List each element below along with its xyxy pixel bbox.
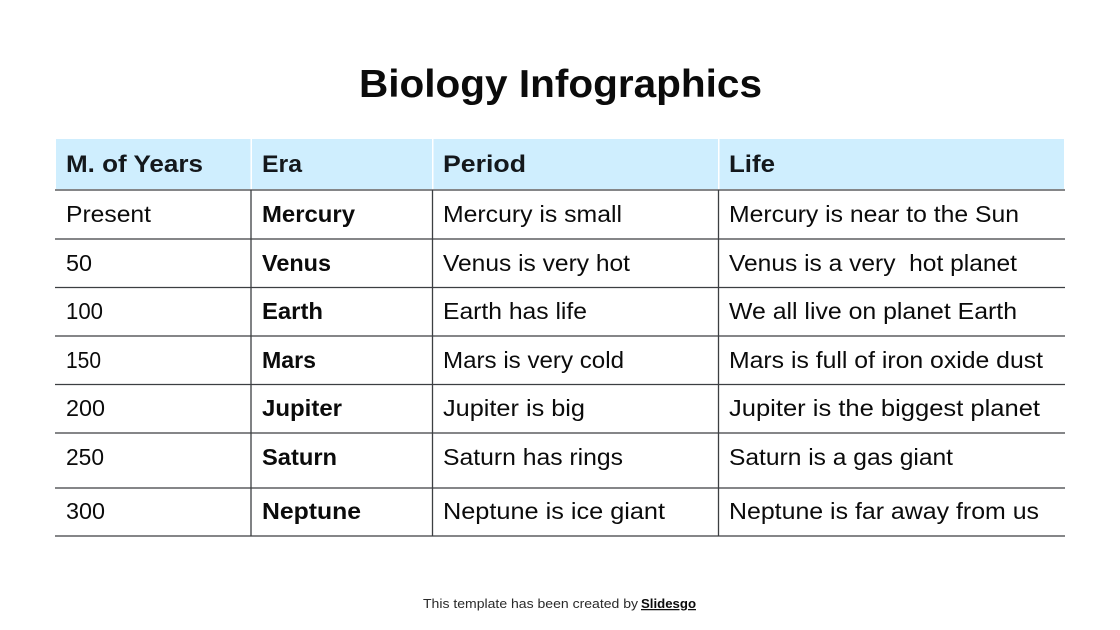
row: Saturn xyxy=(66,444,954,470)
row: Neptune: Neptune is far away from us xyxy=(729,498,1039,524)
row: Venus: Venus is a very hot planet xyxy=(729,250,1018,276)
row: Mars: Mars is full of iron oxide dust xyxy=(729,347,1044,373)
row: Mercury: Mercury is small xyxy=(443,201,622,227)
row: Mercury xyxy=(66,201,1019,227)
table xyxy=(55,139,1065,536)
row: Earth: Earth has life xyxy=(443,298,587,324)
row: Neptune: 300 xyxy=(66,498,105,524)
row: Jupiter: 200 xyxy=(66,395,105,421)
table header row: Period xyxy=(443,151,526,178)
table header row xyxy=(56,139,1064,189)
table header row: M. of Years xyxy=(66,151,203,178)
row: Jupiter: Jupiter xyxy=(262,395,342,421)
row: Earth: We all live on planet Earth xyxy=(729,298,1017,324)
row: Mars: Mars xyxy=(262,347,316,373)
row: Neptune xyxy=(66,498,1039,524)
row: Mars: 150 xyxy=(66,347,101,373)
footer credit: Slidesgo xyxy=(641,597,696,611)
row: Earth: 100 xyxy=(66,298,103,324)
table header row: Life xyxy=(729,151,775,178)
row: Earth xyxy=(66,298,1017,324)
row: Jupiter: Jupiter is the biggest planet xyxy=(729,395,1041,421)
row: Venus: Venus is very hot xyxy=(443,250,631,276)
row: Mercury: Mercury is near to the Sun xyxy=(729,201,1019,227)
row: Mercury: Present xyxy=(66,201,152,227)
table header row: Era xyxy=(262,151,302,178)
row: Saturn: Saturn xyxy=(262,444,337,470)
row: Venus: Venus xyxy=(262,250,331,276)
row: Saturn: Saturn is a gas giant xyxy=(729,444,954,470)
row: Jupiter xyxy=(66,395,1041,421)
row: Earth: Earth xyxy=(262,298,323,324)
row: Mercury: Mercury xyxy=(262,201,355,227)
row: Saturn: 250 xyxy=(66,444,104,470)
row: Mars: Mars is very cold xyxy=(443,347,624,373)
row: Saturn: Saturn has rings xyxy=(443,444,623,470)
footer credit: This template has been created by xyxy=(423,597,639,611)
row: Jupiter: Jupiter is big xyxy=(443,395,585,421)
row: Venus: 50 xyxy=(66,250,92,276)
title: Biology Infographics xyxy=(359,63,762,106)
row: Neptune: Neptune is ice giant xyxy=(443,498,666,524)
row: Mars xyxy=(66,347,1044,373)
row: Venus xyxy=(66,250,1018,276)
row: Neptune: Neptune xyxy=(262,498,361,524)
